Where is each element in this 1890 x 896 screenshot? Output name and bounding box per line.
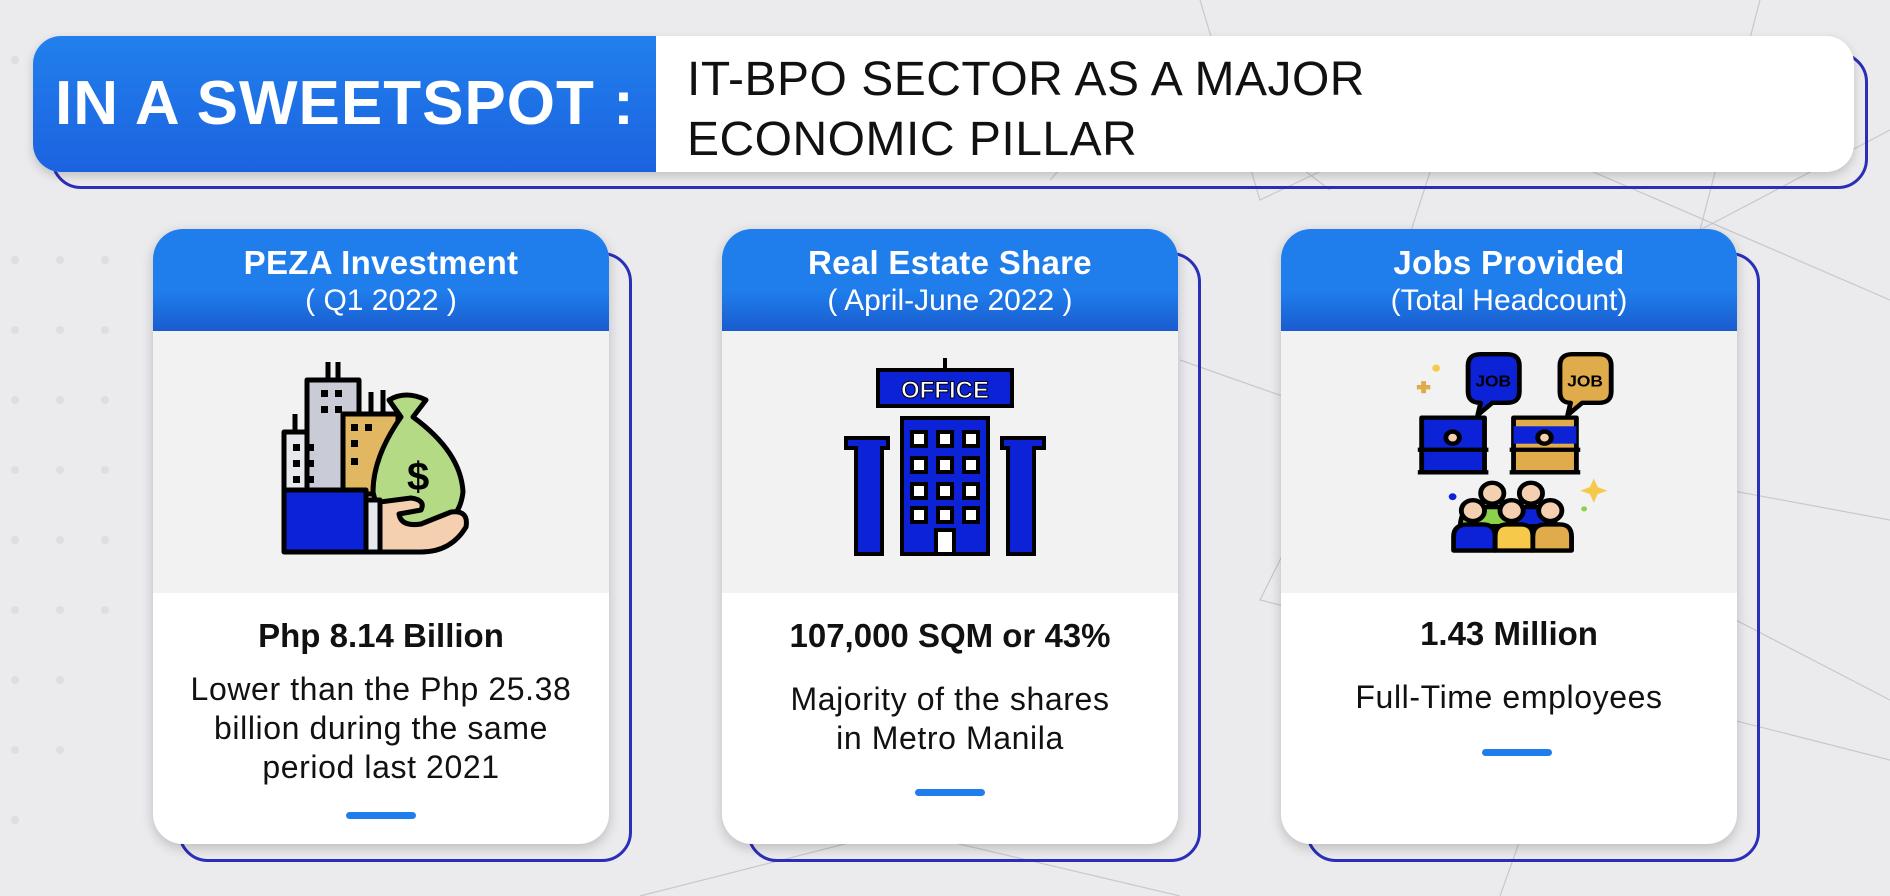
accent dash bbox=[915, 789, 985, 796]
icon: buildings and money bag bbox=[282, 362, 469, 554]
icon: office building bbox=[844, 358, 1046, 556]
panel: PEZA investment bbox=[153, 229, 609, 844]
card 2 heading: Real Estate Share bbox=[808, 244, 1092, 281]
card 2 heading bbox=[722, 229, 1178, 331]
panel: jobs provided bbox=[1281, 229, 1737, 844]
icon: job booths and people bbox=[1416, 352, 1614, 553]
panel: real estate share bbox=[722, 229, 1178, 844]
header: blue label bbox=[33, 36, 656, 172]
card 2 outline bbox=[747, 252, 1201, 862]
card 3 outline bbox=[1306, 252, 1760, 862]
card 3 heading: (Total Headcount) bbox=[1391, 284, 1627, 317]
header: blue label: IN A SWEETSPOT : bbox=[55, 69, 635, 138]
card 3 heading: Jobs Provided bbox=[1393, 244, 1625, 281]
description: Full-Time employees bbox=[1355, 679, 1663, 715]
description: in Metro Manila bbox=[836, 720, 1064, 756]
header outline bbox=[51, 52, 1868, 189]
card 1 heading bbox=[153, 229, 609, 331]
card 1 heading: PEZA Investment bbox=[244, 244, 518, 281]
description: Lower than the Php 25.38 bbox=[191, 671, 571, 707]
description: billion during the same bbox=[214, 710, 548, 746]
description bbox=[790, 681, 1110, 756]
description: period last 2021 bbox=[262, 749, 500, 785]
card 2 heading: ( April-June 2022 ) bbox=[827, 284, 1073, 317]
accent dash bbox=[346, 812, 416, 819]
header bbox=[33, 36, 1854, 172]
header: subtitle: IT-BPO SECTOR AS A MAJOR bbox=[687, 53, 1365, 106]
card 3 heading bbox=[1281, 229, 1737, 331]
value: 107,000 SQM or 43% bbox=[789, 617, 1110, 654]
header: subtitle bbox=[687, 53, 1365, 166]
icon: job booths and people: JOB bbox=[1567, 372, 1603, 390]
accent dash bbox=[1482, 749, 1552, 756]
card 1 heading: ( Q1 2022 ) bbox=[305, 284, 457, 317]
value: 1.43 Million bbox=[1420, 615, 1598, 652]
header: subtitle: ECONOMIC PILLAR bbox=[687, 113, 1137, 166]
description bbox=[191, 671, 571, 785]
value: Php 8.14 Billion bbox=[258, 617, 504, 654]
description: Majority of the shares bbox=[790, 681, 1110, 717]
icon: buildings and money bag: $ bbox=[407, 455, 429, 499]
card 1 outline bbox=[178, 252, 632, 862]
icon: job booths and people: JOB bbox=[1475, 372, 1511, 390]
icon: office building: OFFICE bbox=[901, 377, 989, 404]
